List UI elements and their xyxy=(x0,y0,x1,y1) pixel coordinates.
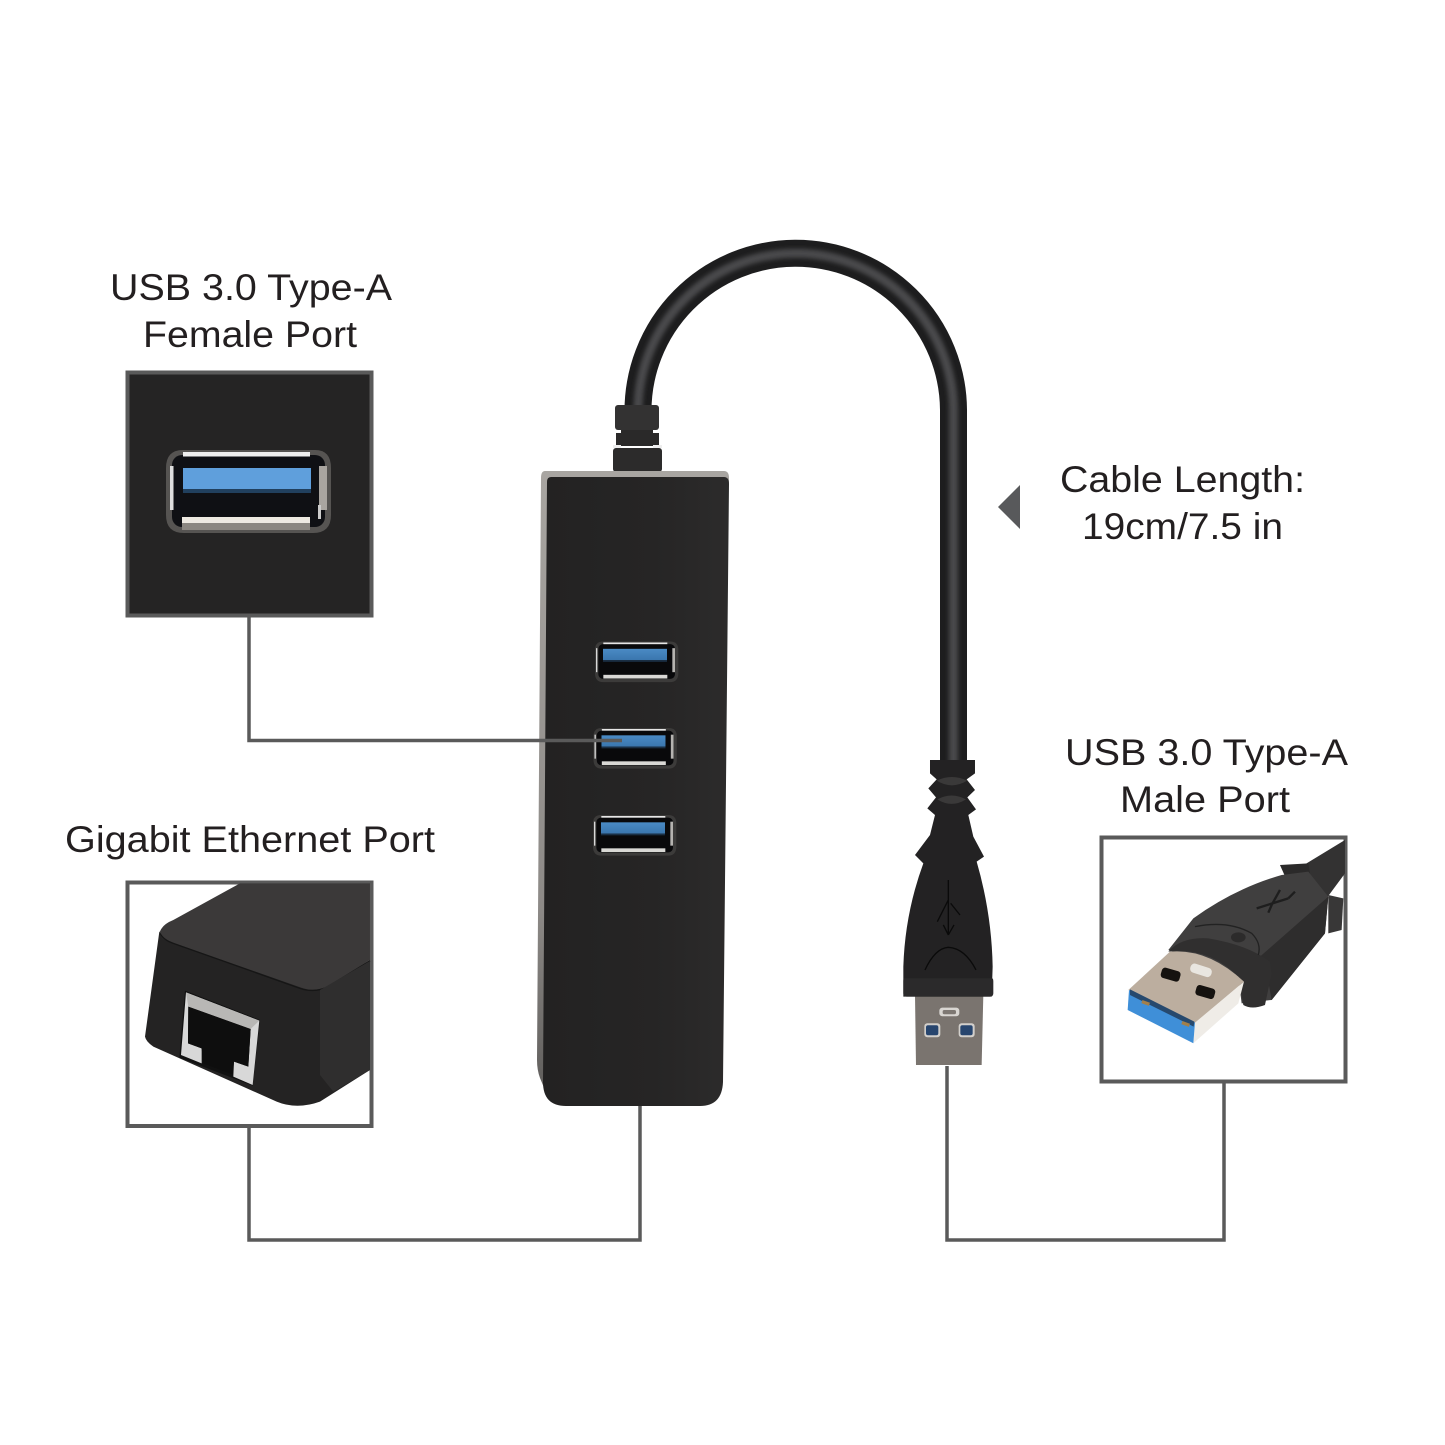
heading: USB 3.0 female port label: USB 3.0 Type-A xyxy=(110,267,392,308)
panel: USB 3.0 female port close-up xyxy=(128,372,372,616)
USB male plug xyxy=(903,760,993,1065)
arrow: cable length pointer xyxy=(998,485,1020,529)
moulded boot xyxy=(903,760,993,997)
heading: USB 3.0 male port label xyxy=(1065,732,1348,820)
connector line: Ethernet panel to hub end xyxy=(249,1106,640,1240)
heading: Gigabit Ethernet port label: Gigabit Ethernet Port xyxy=(65,819,436,860)
heading: USB 3.0 male port label: USB 3.0 Type-A xyxy=(1065,732,1348,773)
connector line: female port panel to hub port xyxy=(249,617,622,740)
hub body xyxy=(537,471,729,1106)
heading: cable length label xyxy=(1060,459,1305,547)
strain relief: hub end xyxy=(613,405,662,472)
plug metal xyxy=(915,995,983,1065)
USB port 3 xyxy=(593,815,676,856)
heading: USB 3.0 female port label: Female Port xyxy=(143,314,358,355)
panel: Gigabit Ethernet port close-up xyxy=(128,882,372,1126)
heading: cable length label: 19cm/7.5 in xyxy=(1082,506,1283,547)
heading: USB 3.0 male port label: Male Port xyxy=(1120,779,1291,820)
heading: cable length label: Cable Length: xyxy=(1060,459,1305,500)
panel: USB 3.0 male port close-up xyxy=(1102,838,1346,1082)
connector line: male port panel to plug xyxy=(947,1066,1224,1240)
heading: USB 3.0 female port label xyxy=(110,267,392,355)
USB port 1 xyxy=(595,642,678,682)
cable xyxy=(638,253,954,765)
USB port 2 xyxy=(594,728,677,769)
